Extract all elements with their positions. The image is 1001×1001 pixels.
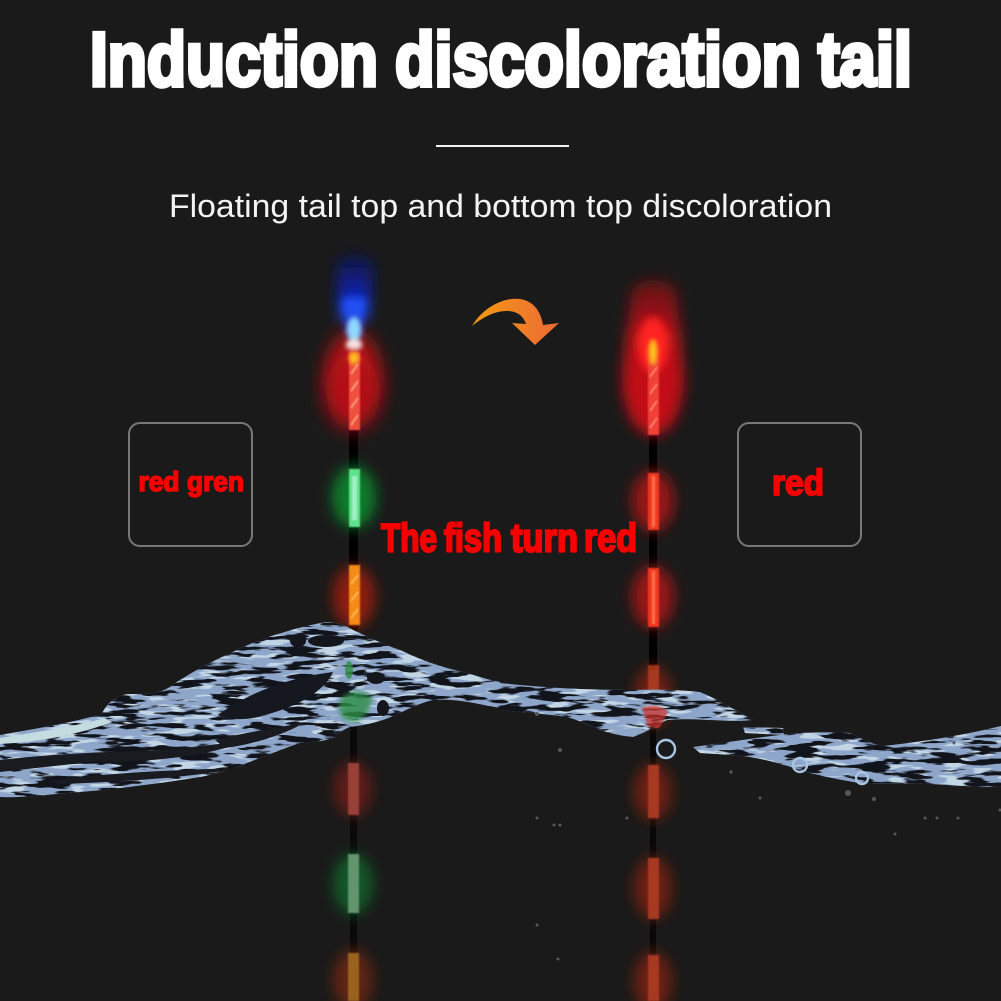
red tip glow [622, 280, 684, 435]
right thin spray [743, 727, 784, 735]
underwater right float [634, 660, 672, 1001]
red segment 2 [632, 471, 674, 531]
title: tail [818, 18, 912, 103]
left float: upper section above water [326, 254, 380, 630]
left crest [0, 622, 500, 797]
caption: the fish turn red: fish [444, 516, 502, 560]
right float: upper section above water [622, 280, 684, 670]
float stem [349, 430, 358, 630]
blue tip glow [328, 254, 378, 412]
orange segment [333, 565, 375, 628]
label: red gren: gren [187, 466, 244, 497]
foam holes on crest [290, 635, 389, 716]
right upper band [500, 683, 753, 737]
pale highlight streak [0, 718, 112, 744]
subtitle: Floating tail top and bottom top discoloration [169, 188, 832, 224]
green segment [332, 466, 376, 528]
submerged orange segment [333, 950, 373, 1001]
submerged segments [634, 665, 672, 1001]
water droplets [535, 712, 1001, 960]
label: red gren: red [138, 466, 180, 497]
float stem [649, 435, 657, 670]
water splash wave [0, 622, 1001, 797]
label: red gren [138, 466, 244, 497]
title: discoloration [395, 18, 801, 103]
title [90, 18, 912, 103]
red segment [326, 352, 380, 430]
left label box [129, 423, 252, 546]
stem [650, 660, 656, 1001]
caption: the fish turn red: The [381, 516, 437, 560]
dark hollow under the crest [218, 672, 333, 719]
caption: the fish turn red: red [584, 516, 637, 560]
caption: the fish turn red: turn [511, 516, 578, 560]
green reflection of submerged segment [339, 692, 372, 722]
red reflection in the water [642, 706, 668, 727]
stem [350, 630, 357, 1001]
title: Induction [90, 18, 378, 103]
underwater left float [333, 630, 373, 1001]
submerged green segment [333, 854, 373, 914]
red segment 3 [632, 566, 674, 628]
right label box [738, 423, 861, 546]
right lower band [693, 726, 1001, 787]
arrow: colour change [472, 299, 559, 345]
label: red: red [772, 462, 824, 503]
water texture bands [0, 622, 1001, 797]
title divider [436, 145, 569, 147]
submerged red segment [334, 762, 372, 816]
right water rings [657, 740, 868, 784]
caption: the fish turn red [381, 516, 637, 560]
dark gaps between streaks [0, 722, 305, 784]
